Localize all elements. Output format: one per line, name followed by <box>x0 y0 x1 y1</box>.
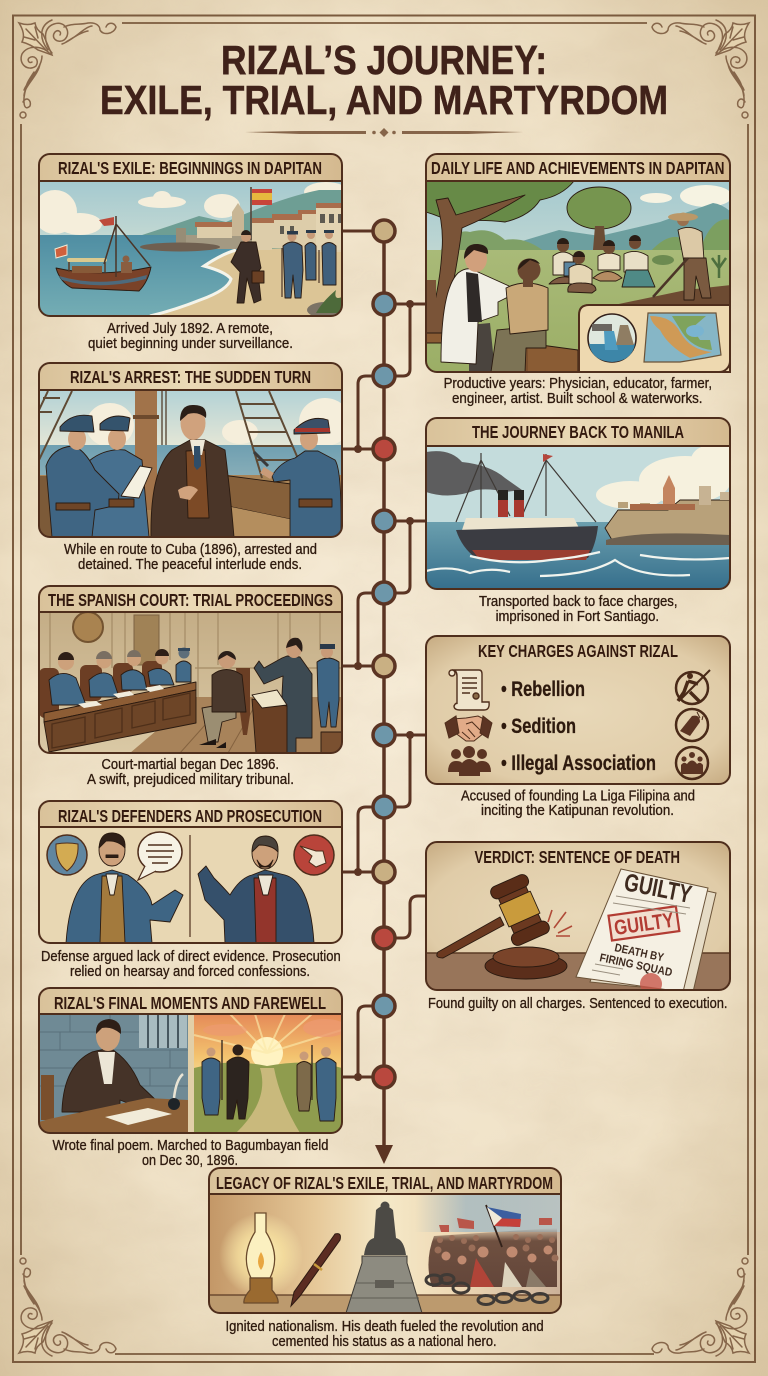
panel: Rizal's arrest <box>39 363 351 537</box>
caption: legacy: Ignited nationalism. His death fueled the revolution and <box>226 1319 544 1335</box>
panel: Spanish court <box>39 586 344 753</box>
caption: final moments <box>52 1138 328 1169</box>
panel: verdict: VERDICT: SENTENCE OF DEATH <box>474 847 680 867</box>
guilty papers <box>576 868 716 995</box>
broken chains <box>426 1274 548 1304</box>
panel: key charges <box>426 636 730 784</box>
header <box>39 988 342 1014</box>
charge: Rebellion <box>501 670 710 704</box>
caption: defenders: Defense argued lack of direct evidence. Prosecution <box>41 949 341 965</box>
panel: legacy <box>209 1168 561 1313</box>
icon: pen <box>291 1234 340 1306</box>
title <box>100 37 668 123</box>
header <box>39 363 342 390</box>
icon: scroll <box>449 670 489 710</box>
icon: gavel <box>437 873 572 979</box>
caption: daily life <box>444 376 712 407</box>
title divider <box>245 128 523 137</box>
caption: defenders <box>41 949 341 980</box>
caption: exile: Arrived July 1892. A remote, <box>107 321 273 337</box>
header <box>39 801 342 827</box>
charge: Rebellion: • Rebellion <box>501 678 585 701</box>
panel: key charges: KEY CHARGES AGAINST RIZAL <box>478 641 678 661</box>
caption: charges <box>461 788 695 819</box>
header <box>426 154 730 181</box>
header <box>39 586 342 612</box>
caption: arrest: detained. The peaceful interlude ends. <box>78 557 302 573</box>
caption: journey <box>479 594 678 625</box>
caption: daily life: Productive years: Physician, educator, farmer, <box>444 376 712 392</box>
charge: Sedition <box>501 709 708 741</box>
icon: speech bubble <box>138 832 182 880</box>
charge: Illegal Association: • Illegal Association <box>501 752 656 775</box>
guilty papers: GUILTY <box>613 909 675 940</box>
guilty papers: GUILTY <box>622 868 694 909</box>
panel: Rizal's exile <box>33 154 348 318</box>
caption: verdict: Found guilty on all charges. Sentenced to execution. <box>428 996 728 1012</box>
icon: oil lamp <box>244 1213 278 1303</box>
caption: journey: imprisoned in Fort Santiago. <box>496 609 659 625</box>
inset: waterworks and map <box>579 305 730 372</box>
header: RIZAL'S EXILE: BEGINNINGS IN DAPITAN <box>58 158 322 178</box>
header <box>426 418 730 446</box>
doctor and patient bench <box>427 332 442 344</box>
caption: court <box>87 757 294 788</box>
caption: defenders: relied on hearsay and forced confessions. <box>70 964 310 980</box>
caption: exile: quiet beginning under surveillance. <box>88 336 293 352</box>
caption: court: A swift, prejudiced military tribunal. <box>87 772 294 788</box>
caption: journey: Transported back to face charges, <box>479 594 678 610</box>
farmer <box>678 227 711 300</box>
panel: verdict <box>426 842 730 995</box>
monument <box>346 1202 422 1313</box>
rally crowd and flags <box>428 1205 558 1287</box>
reading children <box>549 251 655 293</box>
header <box>39 154 342 181</box>
header: RIZAL'S FINAL MOMENTS AND FAREWELL <box>54 993 326 1013</box>
header: THE SPANISH COURT: TRIAL PROCEEDINGS <box>48 590 333 610</box>
header: RIZAL'S ARREST: THE SUDDEN TURN <box>70 367 311 387</box>
panel: defenders and prosecution <box>39 801 342 943</box>
header: RIZAL'S DEFENDERS AND PROSECUTION <box>58 806 322 826</box>
title: EXILE, TRIAL, AND MARTYRDOM <box>100 77 668 123</box>
title: RIZAL’S JOURNEY: <box>221 37 547 83</box>
caption: court: Court-martial began Dec 1896. <box>102 757 279 773</box>
caption: arrest <box>64 542 317 573</box>
caption: exile <box>88 321 293 352</box>
panel: final moments <box>39 988 347 1133</box>
icon: handshake <box>445 716 492 741</box>
icon: shield <box>47 835 87 875</box>
caption: legacy: cemented his status as a national hero. <box>272 1334 497 1350</box>
panel: journey back to Manila <box>426 418 739 589</box>
caption: final moments: on Dec 30, 1896. <box>142 1153 238 1169</box>
caption: final moments: Wrote final poem. Marched to Bagumbayan field <box>52 1138 328 1154</box>
icon: people <box>448 746 491 776</box>
panel: daily life and achievements <box>426 154 732 372</box>
caption: legacy <box>226 1319 544 1350</box>
caption: arrest: While en route to Cuba (1896), arrested and <box>64 542 317 558</box>
header <box>209 1168 561 1194</box>
charge: Illegal Association <box>501 747 708 779</box>
caption: charges: Accused of founding La Liga Filipina and <box>461 788 695 804</box>
guilty papers: DEATH BY <box>613 942 665 964</box>
charge: Sedition: • Sedition <box>501 715 576 738</box>
caption: charges: inciting the Katipunan revolution. <box>481 803 674 819</box>
header: LEGACY OF RIZAL'S EXILE, TRIAL, AND MARTYRDOM <box>216 1173 553 1193</box>
header: THE JOURNEY BACK TO MANILA <box>472 422 684 442</box>
prosecutor <box>198 836 314 943</box>
icon: pointing hand <box>294 835 334 875</box>
timeline with connectors and nodes <box>342 220 426 1164</box>
defender <box>66 833 183 943</box>
guilty papers: FIRING SQUAD <box>598 952 673 979</box>
caption: daily life: engineer, artist. Built school & waterworks. <box>452 391 702 407</box>
